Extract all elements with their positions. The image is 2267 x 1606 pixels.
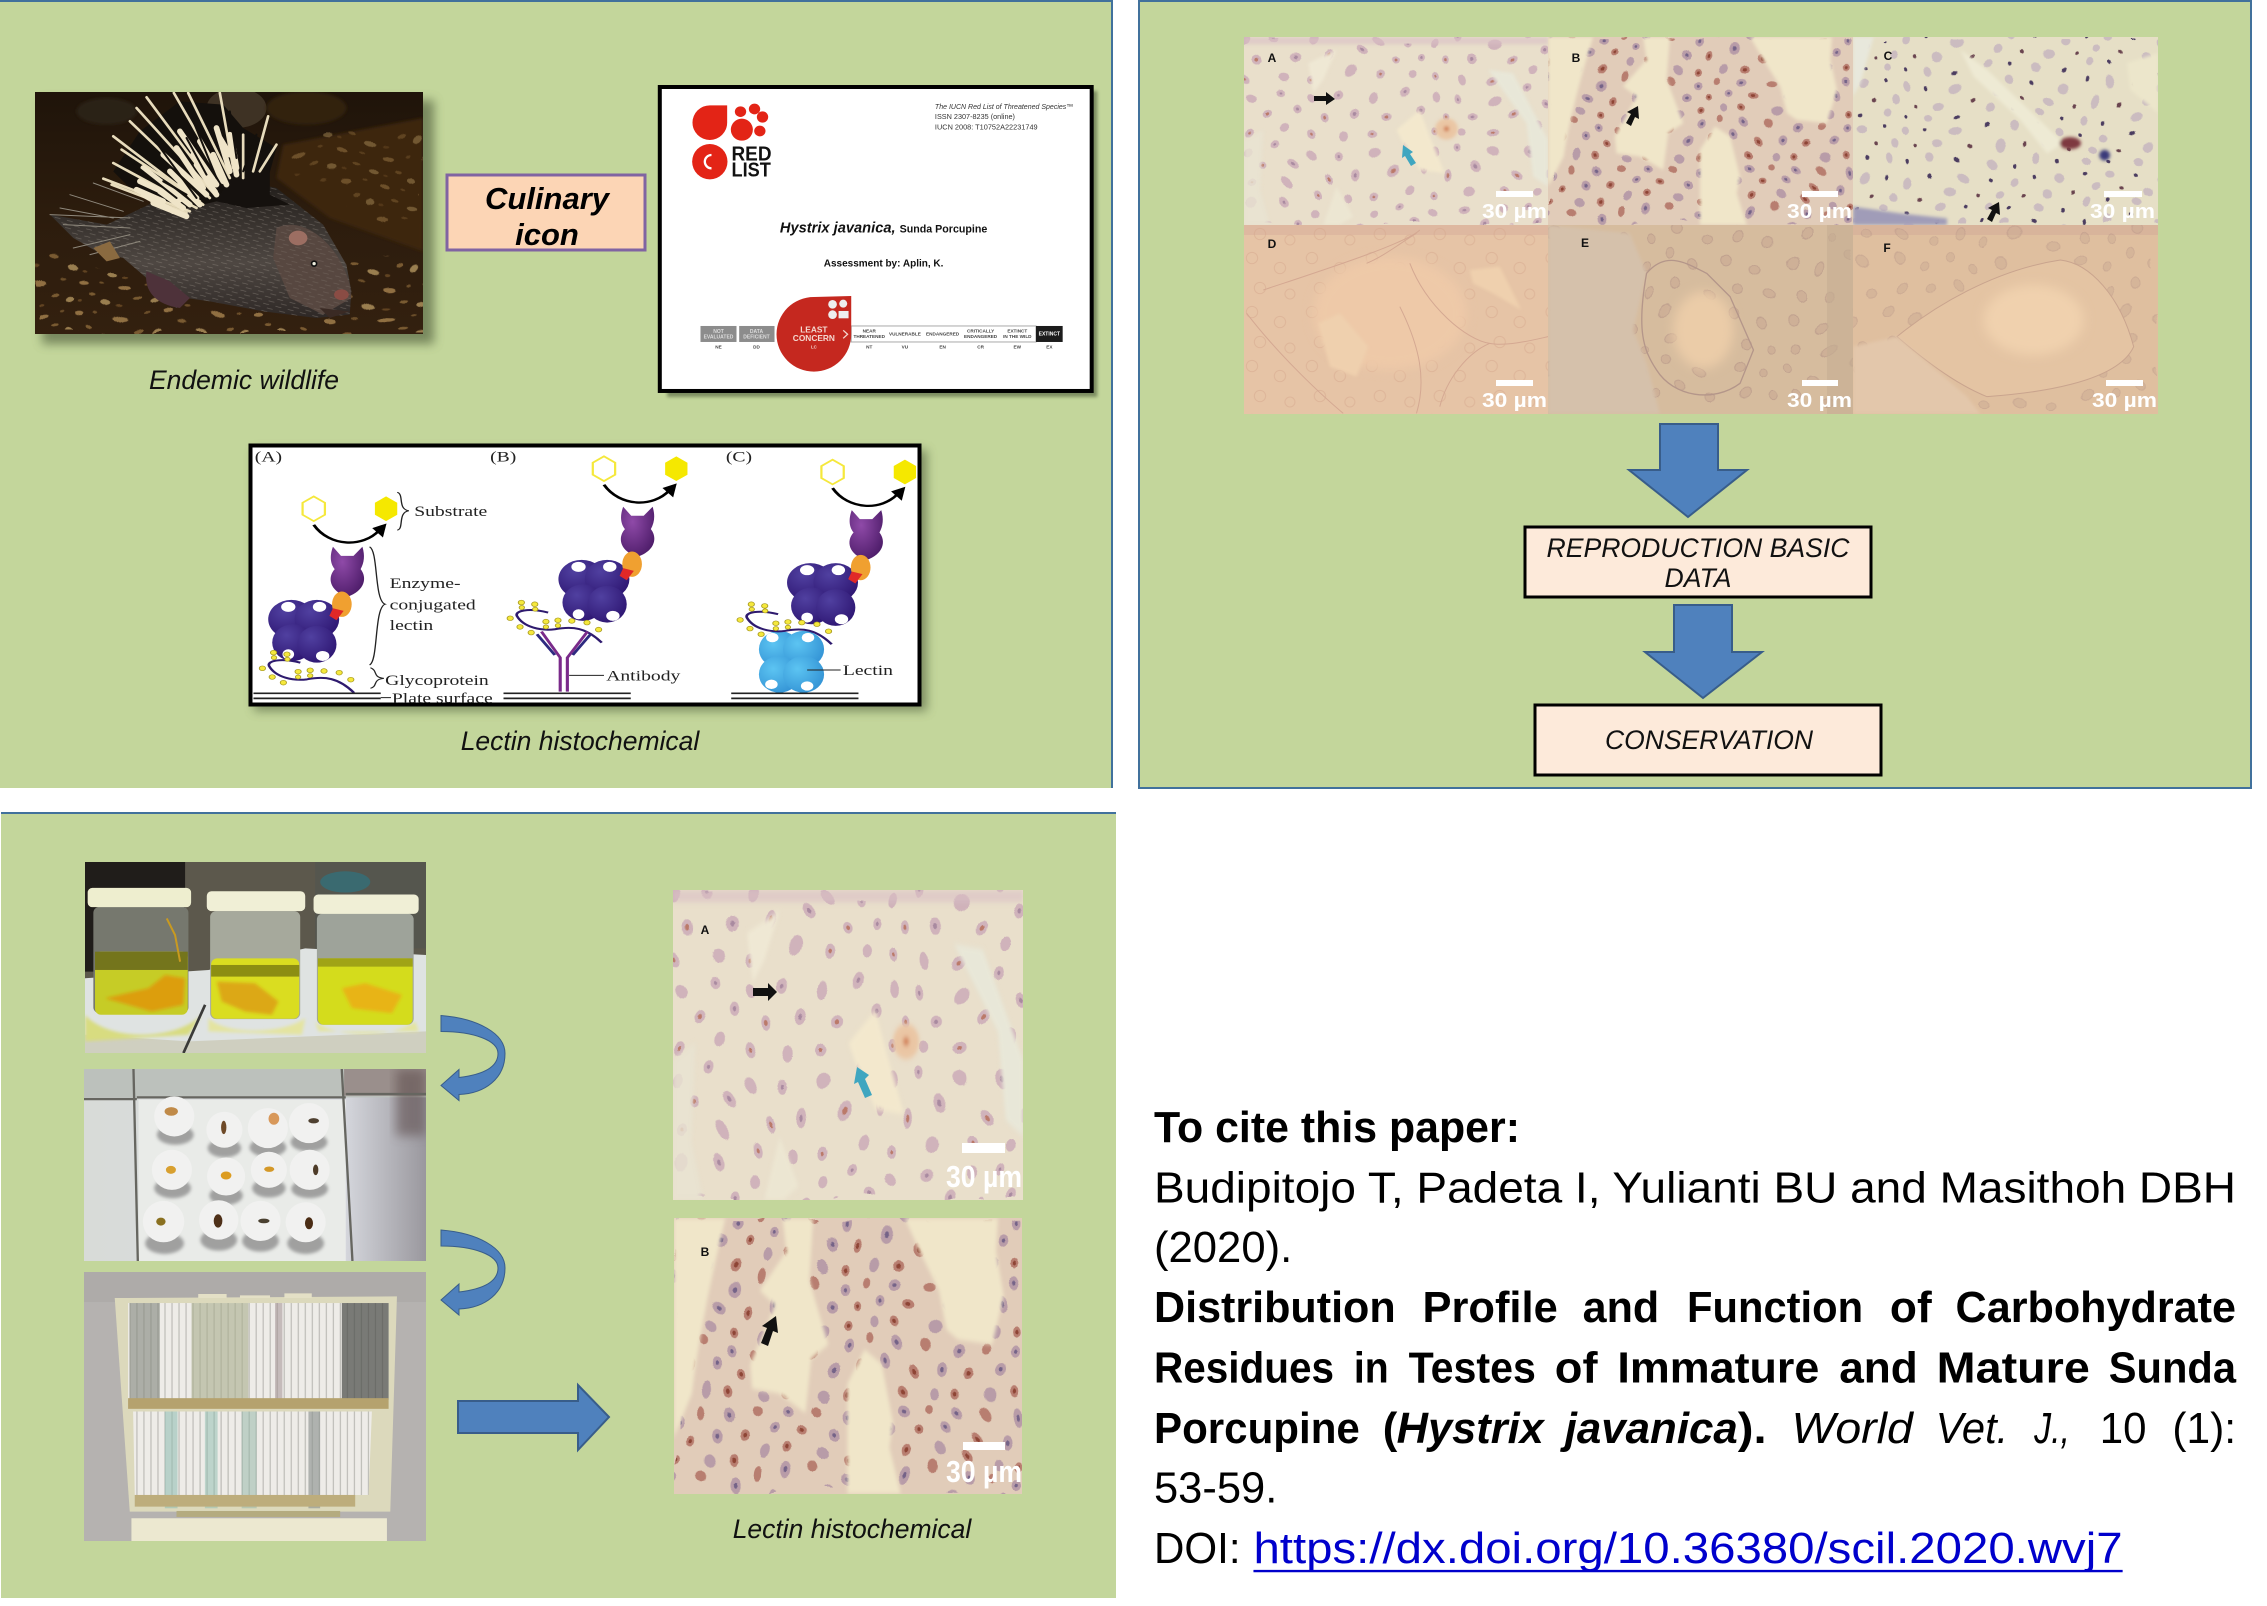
citation title: Residues (1154, 1343, 1334, 1392)
chart: conservation status scale: DEFICIENT (743, 334, 770, 340)
citation title: Carbohydrate (1956, 1283, 2236, 1332)
chart: conservation status scale: NE (715, 345, 722, 350)
caption: lectin histochemical: Lectin histochemical (733, 1514, 972, 1544)
micrograph A: 30 µm (1482, 201, 1547, 223)
chart: conservation status scale: EXTINCT (1039, 332, 1060, 338)
chart: conservation status scale: NT (866, 345, 872, 350)
photo: tissue samples in fixative jars (85, 862, 426, 1053)
citation heading: To cite this paper: (1154, 1103, 1520, 1152)
method C: lectin capture: Lectin (843, 662, 893, 678)
citation journal: J., (2033, 1404, 2070, 1453)
chart: conservation status scale: EW (1014, 345, 1022, 350)
chart: conservation status scale: DATA (750, 329, 763, 335)
chart: conservation status scale: CONCERN (793, 333, 835, 343)
chart: conservation status scale: NEAR (863, 329, 876, 334)
panel: endemic wildlife and lectin overview (0, 0, 1113, 788)
citation title: javanica (1560, 1404, 1738, 1453)
chart: conservation status scale (700, 296, 1063, 372)
citation title: Function (1687, 1283, 1863, 1332)
micrograph C: C (1884, 49, 1893, 63)
chart: conservation status scale: CRITICALLY (967, 329, 995, 334)
micrograph B enlarged: B (701, 1245, 710, 1259)
citation title: Distribution (1154, 1283, 1396, 1332)
box: reproduction basic data: REPRODUCTION BASIC (1547, 533, 1850, 563)
micrograph B: 30 µm (1787, 201, 1852, 223)
box: conservation: CONSERVATION (1605, 725, 1814, 755)
citation title: of (1555, 1343, 1598, 1392)
arrow: curved from jars to wax blocks (441, 1016, 505, 1100)
text: red list reference: IUCN 2008: T10752A22231749 (935, 122, 1038, 131)
diagram: lectin histochemical methods (250, 446, 927, 711)
method A: direct lectin: Glycoprotein (385, 672, 489, 688)
card: IUCN red list assessment (660, 87, 1097, 397)
chart: conservation status scale: EXTINCT (1007, 329, 1027, 334)
jar 3 (314, 895, 419, 1025)
panel: histochemistry results and conservation flow (1139, 1, 2251, 788)
citation title: Profile (1423, 1283, 1558, 1332)
micrograph F: F (1883, 241, 1891, 255)
arrow: curved from wax blocks to slides (441, 1230, 505, 1315)
citation authors: Budipitojo T, Padeta I, Yulianti BU and Masithoh DBH (1154, 1164, 2236, 1213)
micrograph A: A (1268, 51, 1277, 65)
text: assessor: Assessment by: Aplin, K. (824, 258, 944, 269)
chart: conservation status scale: DD (753, 345, 761, 350)
citation journal: (1): (2172, 1404, 2236, 1453)
micrograph A enlarged: 30 µm (946, 1159, 1022, 1194)
photo: slide storage box (84, 1272, 426, 1541)
box: conservation (1535, 705, 1881, 775)
citation title: ( (1383, 1404, 1398, 1453)
micrograph grid: lectin staining A to F (1244, 37, 2158, 414)
citation title: Hystrix (1397, 1404, 1546, 1453)
arrow: micrographs to reproduction data (1629, 424, 1747, 517)
method B: antibody capture (490, 449, 687, 698)
chart: conservation status scale: IN THE WILD (1003, 334, 1032, 339)
shadow: porcupine photo (42, 100, 434, 344)
label: culinary icon (447, 175, 645, 252)
chart: conservation status scale: EX (1046, 345, 1053, 350)
micrograph A enlarged: A (701, 923, 710, 937)
citation journal (1154, 1404, 2236, 1513)
chart: conservation status scale: LC (811, 345, 817, 350)
micrograph E: E (1581, 236, 1589, 250)
caption: lectin histochemical: Lectin histochemical (461, 726, 700, 756)
micrograph E (1548, 225, 1853, 414)
jar 1 (88, 888, 191, 1015)
micrograph C: 30 µm (2090, 201, 2155, 223)
micrograph E: 30 µm (1787, 390, 1852, 412)
method A: direct lectin: Enzyme- (390, 575, 461, 592)
icon: red list logo: RED (732, 142, 772, 165)
panel: sample processing workflow (1, 813, 1116, 1598)
citation journal: 53-59. (1154, 1464, 1277, 1513)
method B: antibody capture: Antibody (606, 668, 681, 684)
micrograph D: 30 µm (1482, 390, 1547, 412)
chart: conservation status scale: VULNERABLE (889, 332, 921, 337)
chart: conservation status scale: NOT (713, 329, 724, 335)
arrow: reproduction data to conservation (1645, 605, 1762, 698)
citation title: Porcupine (1154, 1404, 1360, 1453)
citation title: of (1890, 1283, 1932, 1332)
citation DOI: DOI: (1154, 1524, 1241, 1573)
micrograph B enlarged (674, 1218, 1022, 1494)
micrograph B (1548, 37, 1853, 225)
photo: paraffin blocks on tile (84, 1069, 426, 1261)
box: reproduction basic data: DATA (1665, 563, 1731, 593)
jar 2 (207, 891, 305, 1019)
method C: lectin capture (726, 449, 916, 698)
chart: conservation status scale: THREATENED (853, 334, 886, 339)
citation title: Sunda (2109, 1343, 2237, 1392)
micrograph A enlarged (673, 890, 1023, 1200)
box: reproduction basic data (1525, 527, 1871, 597)
micrograph B: B (1572, 51, 1581, 65)
citation year: (2020). (1154, 1223, 1292, 1272)
label: culinary icon: Culinary (485, 181, 611, 216)
text: red list reference: The IUCN Red List of Threatened Species™ (935, 102, 1073, 111)
method C: lectin capture: (C) (726, 449, 752, 465)
micrograph D (1244, 225, 1548, 414)
method A: direct lectin: (A) (255, 449, 282, 465)
citation title: and (1839, 1343, 1918, 1392)
chart: conservation status scale: ENDANGERED (964, 334, 998, 339)
icon: red list logo: LIST (732, 158, 771, 181)
citation journal: Vet. (1936, 1404, 2008, 1453)
text: red list reference: ISSN 2307-8235 (online) (935, 112, 1015, 121)
method A: direct lectin: lectin (390, 618, 434, 634)
method A: direct lectin (253, 449, 493, 706)
citation title (1154, 1283, 2237, 1453)
citation title: in (1354, 1343, 1389, 1392)
micrograph A (1244, 37, 1548, 225)
text: red list reference (935, 102, 1073, 131)
micrograph F: 30 µm (2092, 390, 2157, 412)
chart: conservation status scale: CR (977, 345, 985, 350)
chart: conservation status scale: VU (902, 345, 909, 350)
citation block (1154, 1103, 2237, 1573)
micrograph B enlarged: 30 µm (946, 1454, 1022, 1489)
citation DOI: https://dx.doi.org/10.36380/scil.2020.wvj7 (1253, 1524, 2123, 1573)
citation title: Testes (1409, 1343, 1536, 1392)
citation title: Mature (1937, 1343, 2090, 1392)
method A: direct lectin: Substrate (414, 503, 488, 519)
micrograph F (1853, 225, 2158, 414)
text: species name: Hystrix javanica, Sunda Porcupine (780, 220, 987, 236)
icon: red list logo (692, 104, 772, 181)
citation journal: World (1791, 1404, 1915, 1453)
method B: antibody capture: (B) (490, 449, 517, 465)
chart: conservation status scale: EN (939, 345, 946, 350)
method A: direct lectin: Plate surface (392, 690, 493, 706)
label: culinary icon: icon (515, 217, 579, 252)
chart: conservation status scale: EVALUATED (704, 334, 734, 340)
citation title: and (1583, 1283, 1659, 1332)
citation title: ). (1738, 1404, 1767, 1453)
photo: sunda porcupine (35, 92, 423, 334)
chart: conservation status scale: LEAST (800, 325, 828, 335)
arrow: slides to micrographs (458, 1385, 609, 1450)
citation journal: 10 (2100, 1404, 2147, 1453)
citation title: Immature (1617, 1343, 1819, 1392)
caption: endemic wildlife: Endemic wildlife (149, 365, 339, 395)
micrograph C (1853, 37, 2158, 225)
chart: conservation status scale: ENDANGERED (926, 332, 960, 337)
micrograph D: D (1268, 237, 1277, 251)
method A: direct lectin: conjugated (390, 597, 476, 613)
